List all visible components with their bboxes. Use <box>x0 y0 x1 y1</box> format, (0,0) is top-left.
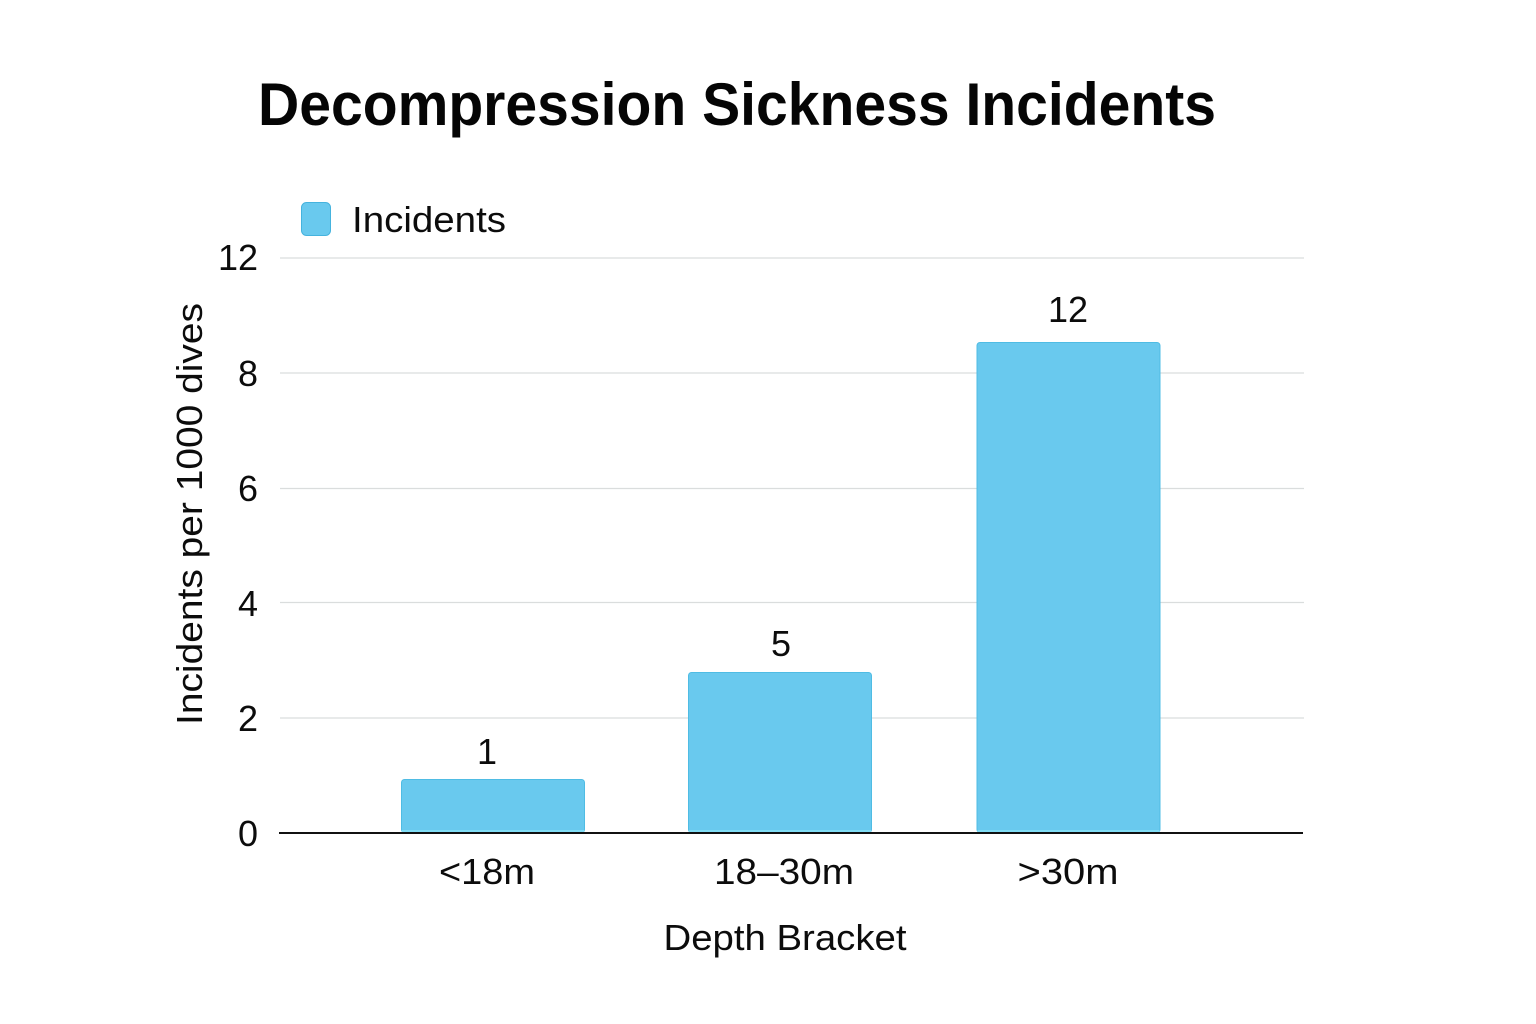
y axis tick labels: 6 <box>238 468 258 509</box>
y axis title: Incidents per 1000 dives <box>169 303 210 725</box>
legend swatch <box>302 202 330 236</box>
y axis tick labels: 12 <box>218 237 258 278</box>
y axis tick labels: 8 <box>238 353 258 394</box>
y axis tick labels <box>218 237 258 854</box>
bar: under 18m <box>402 780 584 832</box>
x axis title: Depth Bracket <box>664 917 906 958</box>
bar value labels: 5 <box>771 623 791 664</box>
bar value labels: 12 <box>1048 289 1088 330</box>
bar value labels <box>477 289 1088 772</box>
y axis tick labels: 0 <box>238 813 258 854</box>
x axis category labels: >30m <box>1018 851 1118 892</box>
y axis tick labels: 4 <box>238 583 258 624</box>
x axis line <box>279 832 1303 834</box>
x axis category labels <box>439 851 1118 892</box>
x axis category labels: 18–30m <box>714 851 854 892</box>
legend <box>302 199 506 240</box>
bar chart <box>169 237 1304 958</box>
x axis category labels: <18m <box>439 851 535 892</box>
y axis tick labels: 2 <box>238 698 258 739</box>
bar value labels: 1 <box>477 731 497 772</box>
title: Decompression Sickness Incidents <box>258 71 1216 138</box>
bar: 18 to 30m <box>688 672 872 832</box>
legend label: Incidents <box>352 199 506 240</box>
bar: over 30m <box>977 342 1160 832</box>
